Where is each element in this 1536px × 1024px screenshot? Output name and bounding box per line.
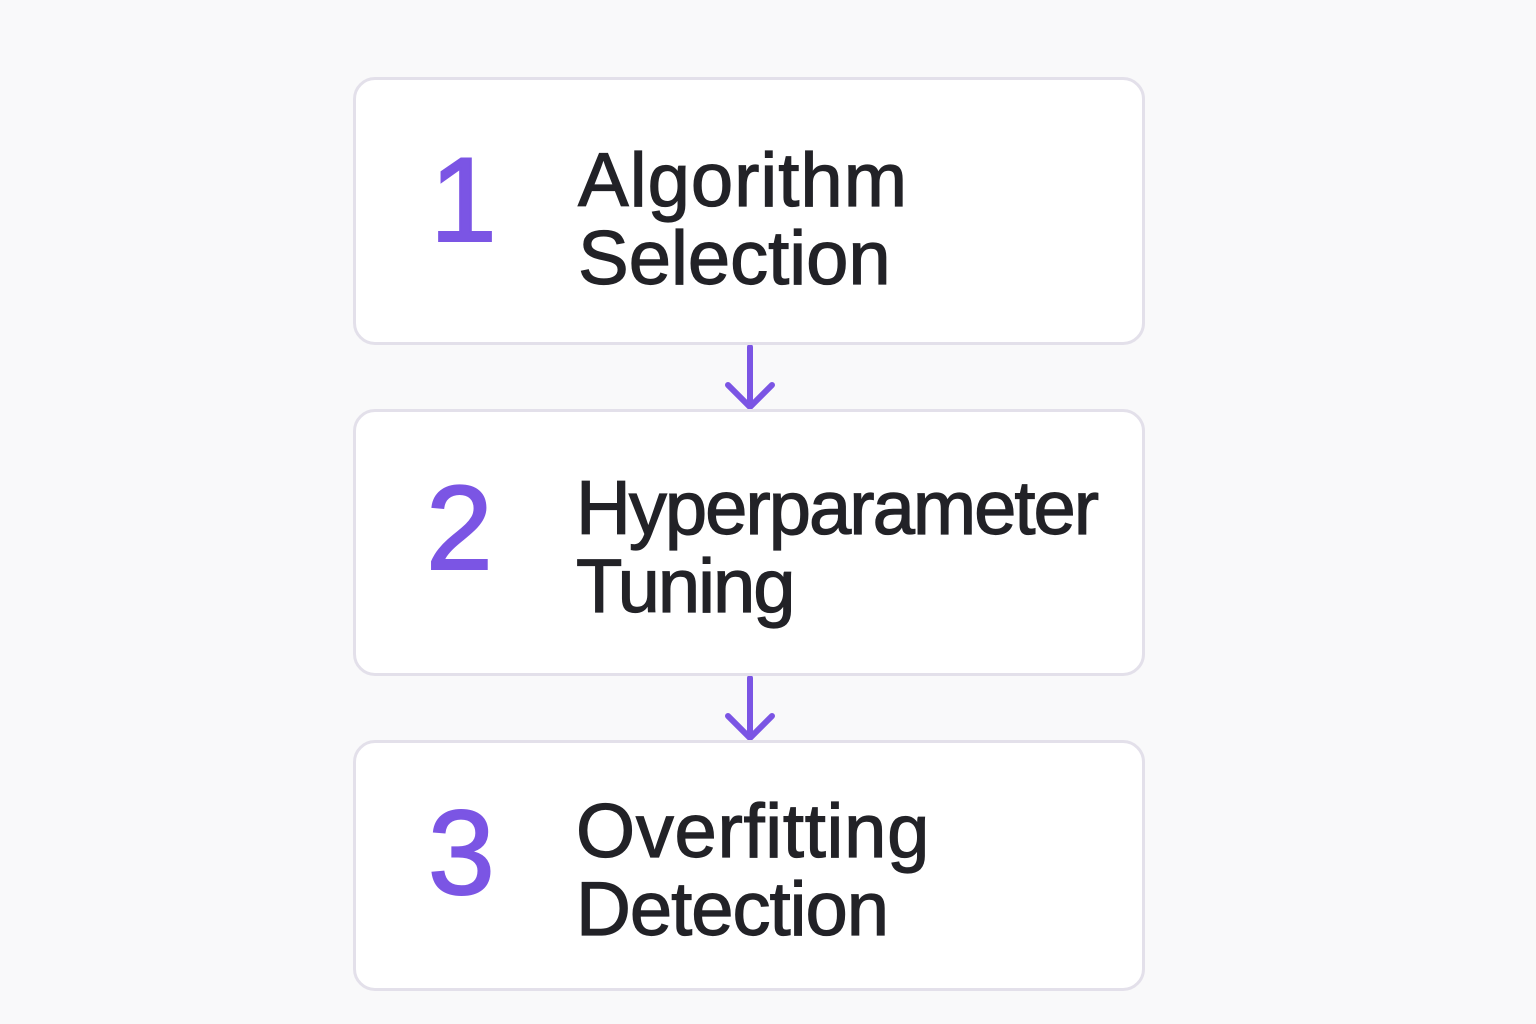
number 2: 2 [426,461,493,595]
text: Hyperparameter Tuning: Hyperparameter [576,466,1097,551]
text: Hyperparameter Tuning: Tuning [576,544,794,629]
number 1: 1 [430,133,497,267]
text: Overfitting Detection [576,789,930,952]
arrow 1 to 2 [725,345,775,409]
panel: step 3 [353,740,1145,991]
text: Overfitting Detection: Detection [576,867,888,952]
text: Algorithm Selection: Selection [578,216,891,301]
number 3: 3 [428,786,495,920]
panel: step 1 [353,77,1145,345]
text: Overfitting Detection: Overfitting [576,789,930,874]
arrow 2 to 3 [725,676,775,740]
text: Algorithm Selection [577,138,908,301]
text: Algorithm Selection: Algorithm [578,138,908,223]
panel: step 2 [353,409,1145,676]
text: Hyperparameter Tuning [576,466,1098,629]
